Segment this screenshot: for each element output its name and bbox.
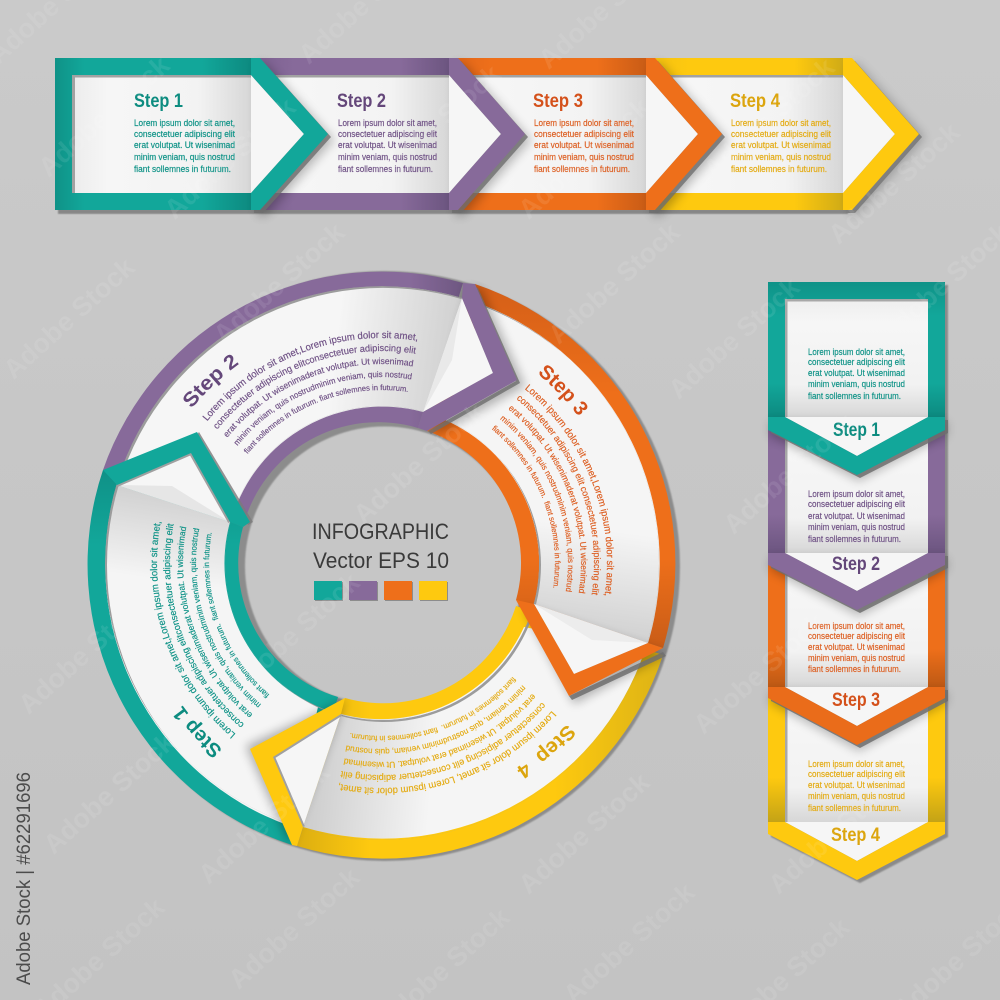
arrow: ring step 1 teal bbox=[103, 432, 253, 527]
vertical step 2 body text: fiant sollemnes in futurum. bbox=[808, 534, 901, 544]
center title bbox=[312, 519, 449, 573]
step 3 curved text: minim veniam, quis nostrudminim veniam, quis nostrud bbox=[500, 416, 574, 592]
step 4 curved text: minim veniam, quis nostrudminim veniam, quis nostrud bbox=[346, 685, 526, 756]
step 1 curved heading: Step 1 bbox=[174, 706, 221, 758]
step 2 heading: Step 2 bbox=[337, 91, 386, 112]
step 4 heading: Step 4 bbox=[730, 91, 780, 112]
faint repeating stock mark: Adobe Stock bbox=[513, 91, 656, 225]
faint repeating stock mark: Adobe Stock bbox=[223, 861, 366, 995]
step 3 curved text bbox=[492, 365, 614, 596]
vertical step 4 heading: Step 4 bbox=[831, 825, 880, 846]
panel: ring segment step 3 bbox=[427, 284, 676, 648]
step 1 curved text: Lorem ipsum dolor sit amet,Lorem ipsum dolor sit amet, bbox=[150, 522, 236, 739]
step 4 body text: consectetuer adipiscing elit bbox=[731, 129, 832, 139]
step 1 curved text: erat volutpat. Ut wisenimaderat volutpat. Ut wisenimad bbox=[176, 526, 252, 717]
vertical step 3 body text bbox=[808, 621, 906, 674]
vertical step 2 body text: Lorem ipsum dolor sit amet, bbox=[808, 489, 905, 499]
faint repeating stock mark: Adobe Stock bbox=[159, 91, 302, 225]
step 4 body text: Lorem ipsum dolor sit amet, bbox=[731, 118, 831, 128]
step 3 curved text: erat volutpat. Ut wisenimaderat volutpat. Ut wisenimad bbox=[508, 406, 588, 594]
faint repeating stock mark: Adobe Stock bbox=[208, 216, 351, 350]
faint repeating stock mark: Adobe Stock bbox=[223, 566, 366, 700]
step 1 body text bbox=[134, 118, 236, 174]
faint repeating stock mark: Adobe Stock bbox=[513, 766, 656, 900]
vertical step 4 body text: erat volutpat. Ut wisenimad bbox=[808, 780, 905, 790]
faint repeating stock mark: Adobe Stock bbox=[698, 51, 841, 185]
step 4 curved text: fiant sollemnes in futurum. fiant sollemnes in futurum. bbox=[350, 676, 516, 742]
faint repeating stock mark: Adobe Stock bbox=[0, 251, 141, 385]
vertical step 3 body text: fiant sollemnes in futurum. bbox=[808, 664, 901, 674]
faint repeating stock mark: Adobe Stock bbox=[718, 406, 861, 540]
panel: ring segment step 4 bbox=[297, 606, 663, 859]
step 2 body text: fiant sollemnes in futurum. bbox=[338, 164, 433, 174]
step 2 curved text: consectetuer adipiscing elitconsectetuer adipiscing elit bbox=[214, 344, 416, 429]
vertical step 3 body text: minim veniam, quis nostrud bbox=[808, 653, 905, 663]
step 3 curved text: Lorem ipsum dolor sit amet,Lorem ipsum dolor sit amet, bbox=[525, 384, 614, 596]
step 2 body text: minim veniam, quis nostrud bbox=[338, 152, 437, 162]
faint repeating stock mark: Adobe Stock bbox=[38, 726, 181, 860]
vertical step 2 body text: minim veniam, quis nostrud bbox=[808, 522, 905, 532]
vertical step 2 panel bbox=[768, 425, 948, 616]
arrow: ring step 4 yellow bbox=[246, 698, 345, 846]
faint repeating stock mark: Adobe Stock bbox=[688, 606, 831, 740]
faint repeating stock mark: Adobe Stock bbox=[663, 271, 806, 405]
step 3 body text bbox=[534, 118, 635, 174]
step 3 heading: Step 3 bbox=[533, 91, 583, 112]
step 3 body text: minim veniam, quis nostrud bbox=[534, 152, 634, 162]
step 2 body text bbox=[338, 118, 438, 174]
center title: INFOGRAPHIC bbox=[312, 519, 449, 544]
arrow: ring step 2 purple bbox=[418, 283, 525, 438]
vertical step 4 body text: Lorem ipsum dolor sit amet, bbox=[808, 759, 905, 769]
side caption: Adobe Stock | #62291696 bbox=[14, 772, 35, 985]
faint repeating stock mark: Adobe Stock bbox=[13, 586, 156, 720]
step 4 curved heading: Step 4 bbox=[517, 726, 575, 778]
step 1 body text: minim veniam, quis nostrud bbox=[134, 152, 235, 162]
vertical step 2 body text: consectetuer adipiscing elit bbox=[808, 499, 906, 509]
vertical step 1 heading: Step 1 bbox=[833, 420, 880, 441]
step 3 body text: consectetuer adipiscing elit bbox=[534, 129, 635, 139]
arrow: ring step 3 orange bbox=[516, 600, 668, 704]
step 4 panel bbox=[650, 58, 925, 214]
panel: vertical step ribbon bbox=[768, 282, 948, 883]
step 3 body text: erat volutpat. Ut wisenimad bbox=[534, 140, 634, 150]
step 3 body text: fiant sollemnes in futurum. bbox=[534, 164, 630, 174]
step 2 curved heading: Step 2 bbox=[184, 354, 239, 406]
vertical step 1 body text bbox=[808, 347, 906, 401]
step 2 panel bbox=[255, 58, 531, 216]
panel: ring segment step 1 bbox=[88, 470, 338, 845]
step 4 body text: minim veniam, quis nostrud bbox=[731, 152, 831, 162]
step 4 body text: fiant sollemnes in futurum. bbox=[731, 164, 827, 174]
step 1 body text: Lorem ipsum dolor sit amet, bbox=[134, 118, 235, 128]
faint repeating stock mark: Adobe Stock bbox=[364, 58, 507, 192]
step 3 curved text: fiant sollemnes in futurum. fiant sollemnes in futurum. bbox=[492, 426, 561, 588]
step 3 body text: Lorem ipsum dolor sit amet, bbox=[534, 118, 634, 128]
faint repeating stock mark: Adobe Stock bbox=[763, 766, 906, 900]
panel: ring segment step 2 bbox=[103, 272, 463, 513]
vertical step 1 body text: fiant sollemnes in futurum. bbox=[808, 391, 901, 401]
step 1 curved text bbox=[150, 522, 270, 758]
step 2 curved text bbox=[184, 330, 418, 454]
step 2 body text: consectetuer adipiscing elit bbox=[338, 129, 438, 139]
faint repeating stock mark: Adobe Stock bbox=[543, 216, 686, 350]
step 4 curved text bbox=[339, 676, 575, 796]
vertical step 4 body text bbox=[808, 759, 906, 813]
faint repeating stock mark: Adobe Stock bbox=[33, 49, 176, 183]
vertical step 1 panel bbox=[768, 282, 948, 481]
vertical step 1 body text: consectetuer adipiscing elit bbox=[808, 357, 906, 367]
vertical step 2 heading: Step 2 bbox=[832, 554, 880, 575]
step 1 body text: fiant sollemnes in futurum. bbox=[134, 164, 231, 174]
center title: Vector EPS 10 bbox=[313, 548, 449, 573]
step 2 body text: Lorem ipsum dolor sit amet, bbox=[338, 118, 437, 128]
vertical step 3 body text: consectetuer adipiscing elit bbox=[808, 631, 906, 641]
vertical step 3 body text: erat volutpat. Ut wisenimad bbox=[808, 642, 905, 652]
step 4 body text: erat volutpat. Ut wisenimad bbox=[731, 140, 831, 150]
step 1 curved text: minim veniam, quis nostrudminim veniam, quis nostrud bbox=[190, 528, 261, 708]
step 2 body text: erat volutpat. Ut wisenimad bbox=[338, 140, 437, 150]
faint repeating stock mark: Adobe Stock bbox=[823, 116, 966, 250]
shadow: circular ring bbox=[90, 271, 680, 861]
vertical step 1 body text: erat volutpat. Ut wisenimad bbox=[808, 368, 905, 378]
vertical step 2 body text: erat volutpat. Ut wisenimad bbox=[808, 511, 905, 521]
step 2 curved text: fiant sollemnes in futurum. fiant sollemnes in futurum. bbox=[244, 384, 408, 454]
vertical step 4 body text: minim veniam, quis nostrud bbox=[808, 791, 905, 801]
step 1 panel bbox=[55, 58, 334, 216]
step 4 curved text: consectetuer adipiscing elit consectetuer adipiscing elit bbox=[340, 703, 545, 782]
step 4 body text bbox=[731, 118, 832, 174]
vertical step 4 panel bbox=[768, 695, 945, 880]
vertical step 1 body text: minim veniam, quis nostrud bbox=[808, 379, 905, 389]
step 1 curved text: consectetuer adipiscing elitconsectetuer adipiscing elit bbox=[163, 523, 244, 727]
step 2 curved text: Lorem ipsum dolor sit amet,Lorem ipsum dolor sit amet, bbox=[202, 330, 418, 421]
step 1 body text: erat volutpat. Ut wisenimad bbox=[134, 140, 235, 150]
vertical step 4 body text: consectetuer adipiscing elit bbox=[808, 769, 906, 779]
step 1 heading: Step 1 bbox=[134, 91, 183, 112]
step 2 curved text: minim veniam, quis nostrudminim veniam, quis nostrud bbox=[234, 371, 412, 446]
colour legend swatches bbox=[314, 581, 448, 601]
vertical step 3 body text: Lorem ipsum dolor sit amet, bbox=[808, 621, 905, 631]
step 4 curved text: Lorem ipsum dolor sit amet, Lorem ipsum dolor sit amet, bbox=[339, 711, 556, 796]
step 3 curved text: consectetuer adipiscing elit consectetuer adipiscing elit bbox=[517, 396, 601, 596]
vertical step 4 body text: fiant sollemnes in futurum. bbox=[808, 803, 901, 813]
vertical step 1 body text: Lorem ipsum dolor sit amet, bbox=[808, 347, 905, 357]
step 1 body text: consectetuer adipiscing elit bbox=[134, 129, 236, 139]
step 1 curved text: fiant sollemnes in futurum. fiant sollemnes in futurum. bbox=[203, 532, 270, 698]
panel: horizontal step ribbon bbox=[55, 58, 925, 216]
vertical step 3 heading: Step 3 bbox=[832, 690, 880, 711]
vertical step 2 body text bbox=[808, 489, 906, 544]
step 4 curved text: erat volutpat. Ut wisenimad erat volutpat. Ut wisenimad bbox=[344, 694, 535, 768]
faint repeating stock mark: Adobe Stock bbox=[193, 756, 336, 890]
step 2 curved text: erat volutpat. Ut wisenimaderat volutpat. Ut wisenimad bbox=[224, 358, 414, 437]
faint repeating stock mark: Adobe Stock bbox=[348, 396, 491, 530]
step 3 curved heading: Step 3 bbox=[540, 365, 588, 415]
step 3 panel bbox=[452, 58, 728, 216]
vertical step 3 panel bbox=[768, 560, 948, 751]
